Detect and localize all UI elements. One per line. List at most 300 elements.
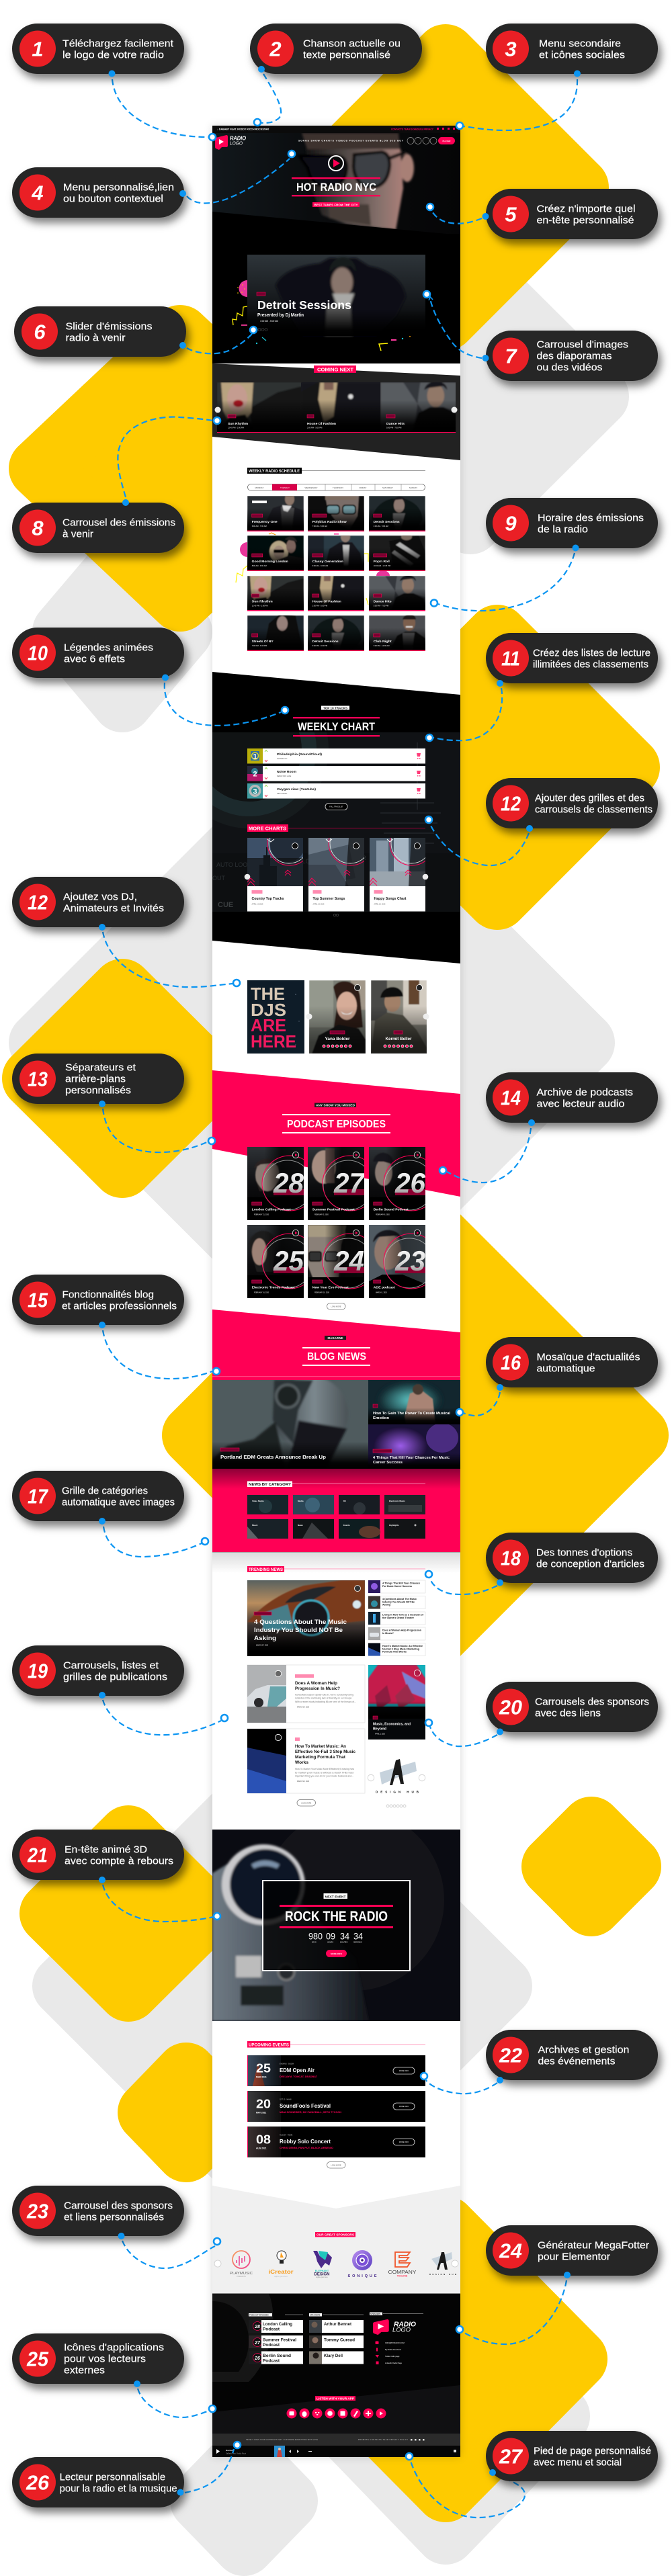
- arrow 3: [456, 79, 577, 130]
- heading: coming next: [314, 366, 356, 373]
- show: Detroit Sessions evening: Detroit Sessions: [312, 640, 339, 644]
- event row: SoundFools Festival: MORE INFO: [399, 2106, 409, 2108]
- mosaic: how to gain article: Emotion: [373, 1416, 389, 1420]
- mockup page base: [212, 126, 460, 2457]
- label: listen with your app: LISTEN WITH YOUR APP: [317, 2397, 354, 2400]
- show card: House Of Fashion: 2:00 PM - 5:00 PM: [307, 426, 323, 429]
- button: load more: [297, 1799, 316, 1806]
- callout 10: Légendes animées: [64, 642, 153, 653]
- mosaic: main article: Portland EDM Greats Announce Break Up: [220, 1454, 326, 1460]
- countdown: 34: [353, 1931, 363, 1942]
- show: Good Morning London: [247, 535, 304, 571]
- callout 6: [14, 306, 186, 357]
- show: Classy Generation: 9:00 AM - 10:00 AM: [312, 564, 329, 567]
- sponsor: elephant design: ELEPHANT: [315, 2270, 329, 2272]
- callout 12 left: [12, 877, 184, 927]
- footer podcast: Berlin Sound: [249, 2352, 303, 2364]
- show: Club Night: 9:30 PM - 12:00 AM: [374, 644, 390, 647]
- mosaic: 4 things article: [368, 1423, 460, 1469]
- callout 26: [12, 2457, 184, 2507]
- chart card: Top Summer Songs: APRIL 14, 2019: [313, 903, 325, 906]
- arrow 12 right: [425, 816, 529, 865]
- day tabs: WEDNESDAY: [304, 486, 318, 489]
- callout 26: Lecteur personnalisable: [60, 2471, 165, 2483]
- callout 1: 1: [32, 38, 44, 60]
- event row: EDM Open Air: [247, 2055, 425, 2086]
- chart card: Country Top Tracks: Country Top Tracks: [251, 897, 284, 901]
- category: music: Music: [252, 1524, 258, 1527]
- panel: DJ carousel: [247, 980, 429, 1054]
- category: highlights: [384, 1519, 425, 1539]
- arrow 23: [122, 2238, 220, 2268]
- podcast 27: FEBRUARY 5, 2020: [314, 1213, 329, 1216]
- callout 17: automatique avec images: [62, 1497, 175, 1508]
- schedule confetti: [236, 533, 390, 605]
- show: Polybius Radio Show: 7:00 AM - 8:00 AM: [312, 525, 328, 527]
- show: Sun Rhythm: Sun Rhythm: [252, 599, 273, 603]
- callout 16: Mosaïque d'actualités: [536, 1352, 640, 1363]
- card: Kermit Beller: [371, 980, 427, 1054]
- callout 24: Générateur MegaFotter: [538, 2240, 649, 2251]
- chart row 1: Philadelphia (SoundCloud): [277, 753, 322, 757]
- callout 20: avec des liens: [535, 1708, 601, 1719]
- button: load more: [327, 2162, 345, 2168]
- callout 12 right: carrousels de classements: [535, 804, 653, 816]
- column: speakers: SPEAKERS: [310, 2314, 321, 2317]
- sponsor: elephant design: tagline goes here: [316, 2276, 329, 2278]
- callout 21: [12, 1830, 184, 1880]
- podcast 23: ADE podcast: [374, 1286, 395, 1290]
- show card: Sun Rhythm: 12:45 PM - 2:00 PM: [228, 426, 245, 429]
- callout 3: Menu secondaire: [539, 38, 621, 50]
- label: any show you missed: [314, 1103, 356, 1107]
- chart row 2: SEBASTIAN LANE: [277, 775, 292, 777]
- podcast 25: [247, 1225, 317, 1298]
- day tabs: SUNDAY: [409, 486, 417, 489]
- callout 8: à venir: [62, 528, 93, 540]
- callout 12 right: Ajouter des grilles et des: [535, 793, 644, 804]
- show: Detroit Sessions: [369, 496, 425, 531]
- post card: music economics: Beyond: [373, 1727, 386, 1731]
- callout 8: 8: [32, 516, 44, 540]
- event row: Robby Solo Concert: MORE INFO: [399, 2141, 409, 2143]
- arrow 11: [426, 688, 502, 741]
- category grid: [247, 1495, 425, 1539]
- slide title: Detroit Sessions: [257, 298, 351, 312]
- post card: how to market music: [247, 1729, 365, 1793]
- heading: blog news: BLOG NEWS: [307, 1351, 366, 1363]
- footer logo: RADIO: [394, 2321, 416, 2329]
- callout 18: 18: [501, 1547, 521, 1570]
- card: the djs are here: THE: [251, 984, 285, 1004]
- label: any show you missed: ANY SHOW YOU MISSED: [316, 1103, 355, 1107]
- category: news: News: [298, 1524, 303, 1527]
- callout 27: 27: [499, 2444, 523, 2468]
- callout 1: le logo de votre radio: [62, 50, 164, 60]
- podcast 25: Electronic Trends Podcast: [252, 1286, 295, 1290]
- callout 27: [486, 2431, 658, 2481]
- sponsor: design hub: [429, 2252, 456, 2276]
- chart row 2: Noise Room: [277, 770, 296, 774]
- callout 14: 14: [501, 1086, 521, 1110]
- callout 22: 22: [499, 2044, 522, 2067]
- label: next event: NEXT EVENT: [325, 1895, 346, 1898]
- sidebar post list: [368, 1580, 425, 1656]
- callout 13: Séparateurs et: [65, 1062, 136, 1074]
- callout 3: [486, 24, 658, 74]
- show: Dance Hits: [369, 575, 425, 611]
- countdown labels: DAYS: [312, 1942, 317, 1943]
- arrow 25: [138, 2389, 216, 2417]
- chart card: Happy Songs Chart: APRIL 14, 2019: [374, 903, 386, 906]
- button: more info: [326, 1950, 347, 1957]
- callout 17: 17: [28, 1485, 49, 1508]
- event row: Robby Solo Concert: [247, 2127, 425, 2157]
- callout 19: [12, 1645, 184, 1696]
- schedule heading: [247, 468, 425, 474]
- show: Detroit Sessions: 4:00 AM - 5:00 AM: [374, 525, 389, 527]
- show: Good Morning London: 8:00 AM - 9:00 AM: [252, 564, 267, 567]
- turntable background photo: CUE: [218, 901, 233, 909]
- event row: EDM Open Air: DEEJAYM, TOMCAT, DEADBAT: [280, 2075, 317, 2078]
- label: top 10 tracks: TOP 10 TRACKS: [323, 707, 347, 710]
- speaker: Klary Dell: Klary Dell: [324, 2354, 343, 2358]
- turntable background photo: [170, 670, 460, 912]
- sidebar post 1: For Music Career Success: [382, 1585, 412, 1588]
- callout 9: Horaire des émissions: [538, 512, 644, 524]
- show: Detroit Sessions evening: [308, 615, 364, 651]
- event row: EDM Open Air: EVENING · SALEM: [280, 2063, 294, 2065]
- callout 20: [486, 1682, 658, 1732]
- featured post card: MARCH 27, 2020: [256, 1645, 269, 1646]
- turntable background photo: AUTO LOOP: [216, 861, 251, 868]
- countdown labels: [312, 1942, 362, 1943]
- callout 21: avec compte à rebours: [65, 1856, 173, 1866]
- callout 12 left: Ajoutez vos DJ,: [63, 891, 137, 903]
- category: media: Media: [298, 1500, 304, 1502]
- speaker: Tommy Curead: Tommy Curead: [324, 2338, 355, 2342]
- sidebar post 2: Asking: [382, 1604, 390, 1606]
- chart row 2: [247, 766, 425, 781]
- day tabs: TUESDAY: [280, 486, 290, 489]
- arrow 2: [254, 74, 281, 126]
- callout 4: [12, 167, 184, 218]
- carousel arrows: [215, 407, 457, 413]
- callout 13: [12, 1054, 184, 1104]
- sidebar post 3: [368, 1612, 425, 1625]
- chart row 2: 2: [253, 770, 257, 778]
- callout 7: ou des vidéos: [536, 361, 602, 374]
- callout 26: 26: [26, 2471, 50, 2494]
- chart card: Country Top Tracks: [247, 821, 312, 911]
- sidebar post 4: [368, 1627, 425, 1640]
- callout 20: 20: [499, 1696, 522, 1719]
- hero face photo: [299, 133, 414, 230]
- sponsor: icreator: [269, 2251, 294, 2278]
- chart row 1: [247, 748, 425, 763]
- chart row 3: Oxygen view (Youtube): [277, 787, 316, 791]
- callout 17: Grille de catégories: [62, 1485, 148, 1497]
- day tabs: MONDAY: [255, 486, 263, 489]
- callout 12 right: 12: [501, 791, 521, 816]
- time: 4:00 AM - 5:00 AM: [260, 320, 278, 323]
- day tabs: THURSDAY: [333, 486, 343, 489]
- card: Yana Bolder: [309, 980, 366, 1054]
- sidebar post 5: Formula That Works: [382, 1651, 407, 1654]
- label: magazine: [325, 1336, 346, 1340]
- mosaic: 4 things article: Career Success: [373, 1461, 403, 1465]
- post card: music economics: Music, Economics, and: [373, 1723, 411, 1727]
- sponsor: design hub: DESIGN HUB: [429, 2273, 456, 2276]
- callout 16: [486, 1337, 658, 1387]
- callout 7: Carrousel d'images: [536, 339, 628, 351]
- callout 13: personnalisés: [65, 1084, 131, 1097]
- callout 1: Téléchargez facilement: [62, 38, 174, 50]
- callout 14: [486, 1072, 658, 1123]
- sponsor logo: design hub: DESIGN HUB: [376, 1790, 419, 1794]
- button: load more: LOAD MORE: [331, 1306, 341, 1307]
- panel: footer: [212, 2293, 460, 2457]
- event row: SoundFools Festival: MAIA SCHNEIDER, MC PANICBALL, SETH TYCOON: [280, 2111, 342, 2114]
- callout 4: 4: [31, 181, 44, 204]
- callout 21: 21: [27, 1844, 48, 1866]
- callout 6: 6: [34, 320, 46, 344]
- show: Detroit Sessions: Detroit Sessions: [374, 520, 400, 524]
- callout 2: texte personnalisé: [303, 50, 390, 60]
- copyright bar: [212, 2434, 460, 2446]
- callout 2: Chanson actuelle ou: [303, 38, 401, 50]
- footer podcast: Summer Festival: Podcast: [263, 2344, 280, 2348]
- slider dots: [258, 328, 267, 331]
- heading: upcoming events: [247, 2041, 425, 2048]
- connector start dots above callouts: [99, 66, 581, 2495]
- category: music: [247, 1519, 288, 1539]
- post card: how to market music: Works: [295, 1760, 309, 1765]
- footer podcast: Summer Festival: 27: [254, 2341, 261, 2346]
- sponsor: sonique: [348, 2250, 377, 2278]
- app icons: [286, 2408, 386, 2419]
- category: electronic music: Electronic Music: [389, 1500, 405, 1502]
- connector arrows: [103, 74, 577, 2518]
- callout 15: 15: [28, 1289, 48, 1312]
- callout 25: 25: [26, 2348, 49, 2370]
- sidebar post 4: Does A Woman Help Progression: [382, 1629, 421, 1631]
- play icon: [329, 156, 343, 171]
- event row: EDM Open Air: EDM Open Air: [280, 2067, 314, 2073]
- chart row 1: 1: [253, 753, 257, 761]
- heading: coming next: COMING NEXT: [317, 367, 353, 372]
- chart row 3: 3: [253, 787, 257, 796]
- podcast 23: 23: [394, 1245, 425, 1277]
- show card: House Of Fashion: [301, 382, 381, 433]
- category: electronic music: [384, 1495, 425, 1514]
- arrow 24: [456, 2280, 566, 2344]
- post card: how to market music: important thing you can do for your music business and...: [295, 1775, 353, 1778]
- footer podcast: Berlin Sound: Berlin Sound: [263, 2354, 291, 2358]
- show: Frequency One: 6:00 AM - 7:00 AM: [252, 525, 267, 527]
- callout 16: automatique: [536, 1363, 595, 1375]
- button: more info: MORE INFO: [331, 1952, 343, 1955]
- callout 24: pour Elementor: [538, 2251, 610, 2263]
- turntable background photo: SAMPLER: [337, 855, 367, 861]
- panel: blog news: [212, 1310, 460, 1553]
- event row: EDM Open Air: MAR 2021: [256, 2076, 267, 2079]
- post card: does a woman help: [247, 1665, 365, 1723]
- heading: more charts: MORE CHARTS: [249, 825, 286, 832]
- live badge: [257, 292, 265, 296]
- show card: Dance Hits: 5:00 PM - 7:00 PM: [386, 426, 402, 429]
- callout 18: de conception d'articles: [536, 1559, 644, 1570]
- event row: SoundFools Festival: 20: [256, 2098, 271, 2111]
- event row: SoundFools Festival: OCT 15 · MIAMI: [280, 2099, 292, 2100]
- countdown: 09: [326, 1931, 335, 1942]
- column: footer contacts: [370, 2313, 423, 2364]
- callout 7: des diaporamas: [536, 351, 612, 361]
- footer podcast: Summer Festival: [249, 2335, 303, 2348]
- post card: how to market music: How To Market Music: An: [295, 1744, 346, 1749]
- show: House Of Fashion: [308, 576, 364, 611]
- copyright bar: PROMOTE CONTACTS TEAM PRIVACY POLICY: [358, 2439, 408, 2441]
- callout 15: et articles professionnels: [62, 1301, 177, 1312]
- category: video: Video Media: [252, 1500, 264, 1502]
- callout 12 left: 12: [28, 891, 48, 914]
- footer podcast: London Calling: Podcast: [263, 2327, 280, 2331]
- podcast 23: MARCH 1, 2020: [376, 1291, 387, 1294]
- sidebar post 2: 4 Questions About The Music: [382, 1598, 417, 1600]
- heading: trending news: [247, 1566, 425, 1572]
- callout 11: Créez des listes de lecture: [533, 648, 650, 658]
- show: Classy Generation: [308, 531, 364, 571]
- callout 11: illimitées des classements: [533, 658, 648, 671]
- day tabs: [247, 484, 425, 490]
- show: Polybius Radio Show: Polybius Radio Show: [312, 520, 347, 524]
- panel: upcoming events: [247, 2041, 425, 2168]
- chart card: Happy Songs Chart: Happy Songs Chart: [374, 897, 407, 901]
- chart card: Top Summer Songs: [308, 821, 373, 911]
- sponsor: sonique: SONIQUE: [348, 2274, 377, 2278]
- callout 14: Archive de podcasts: [536, 1087, 633, 1098]
- post card: how to market music: Effective No-Fail 3 Step Music: [295, 1750, 355, 1754]
- label: magazine: MAGAZINE: [328, 1336, 343, 1340]
- event box: [263, 1881, 410, 1971]
- carousel arrows: [306, 1013, 429, 1020]
- panel: hero header: [212, 126, 460, 363]
- round icon buttons: [407, 137, 437, 144]
- show: Pop'n Roll: Pop'n Roll: [374, 560, 390, 564]
- arrow 27: [406, 2453, 525, 2518]
- callout 25: Icônes d'applications: [64, 2342, 164, 2353]
- label: our great sponsors: [315, 2232, 355, 2237]
- callout 22: des événements: [538, 2056, 616, 2067]
- countdown: 980: [308, 1931, 323, 1942]
- callout 25: pour vos lecteurs: [64, 2353, 146, 2365]
- mosaic: 4 things article: 4 Things That Kill Your Chances For Music: [373, 1456, 450, 1460]
- post card: music economics: [368, 1665, 425, 1740]
- callout 23: Carrousel des sponsors: [64, 2200, 173, 2212]
- callout 18: Des tonnes d'options: [536, 1547, 632, 1559]
- hero title: HOT RADIO NYC: [296, 181, 376, 194]
- callout 12 right: [486, 778, 658, 828]
- footer podcast: Berlin Sound: Podcast: [263, 2360, 280, 2364]
- button: load more: LOAD MORE: [331, 2165, 341, 2166]
- show: House Of Fashion: House Of Fashion: [312, 599, 341, 603]
- arrow 18: [425, 1571, 497, 1594]
- event row: SoundFools Festival: [247, 2091, 425, 2122]
- post card: does a woman help: reminded of the continuing lack of diversity on our lineups.: [295, 1697, 352, 1700]
- sidebar post 3: the Opera's Grand Theatre: [382, 1617, 414, 1619]
- heading: more charts: [247, 824, 425, 832]
- show card: House Of Fashion: House Of Fashion: [307, 422, 336, 426]
- podcast 23: [369, 1225, 439, 1298]
- button: load more: [327, 1303, 345, 1310]
- show: Club Night: [369, 614, 425, 651]
- card: the djs are here: DJS: [251, 1000, 286, 1020]
- event row: Robby Solo Concert: CHRIS DENNI, PAN PUT, BLACK ARSENIO: [280, 2147, 334, 2149]
- show: Good Morning London: Good Morning London: [252, 560, 288, 564]
- card: the djs are here: [247, 980, 304, 1054]
- podcast 24: 24: [333, 1245, 364, 1277]
- card: the djs are here: ARE: [251, 1015, 286, 1035]
- show card: Dance Hits: [380, 382, 460, 433]
- footer podcast: Berlin Sound: 26: [254, 2356, 260, 2361]
- carousel arrows: [214, 2260, 458, 2267]
- arrow 17: [103, 1527, 208, 1557]
- carousel dots: [386, 1805, 406, 1807]
- footer podcast: London Calling: [249, 2320, 303, 2333]
- event row: Robby Solo Concert: AUG 2021: [256, 2147, 267, 2150]
- callout 22: [486, 2030, 658, 2080]
- chart row 1: LESTER FOY: [277, 758, 288, 760]
- callout 11: [486, 633, 658, 683]
- event row: SoundFools Festival: SoundFools Festival: [280, 2103, 331, 2109]
- callout 25: externes: [64, 2365, 105, 2376]
- panel: 3D countdown hero: [212, 1809, 460, 2021]
- callout 25: [12, 2333, 184, 2384]
- carousel dots: [333, 914, 339, 916]
- countdown labels: MINUTES: [340, 1942, 348, 1943]
- callout 9: de la radio: [538, 524, 588, 535]
- callout 13: 13: [28, 1067, 48, 1091]
- category: dj: [339, 1495, 380, 1514]
- event row: EDM Open Air: 25: [256, 2061, 271, 2075]
- category: events: [339, 1519, 380, 1539]
- sponsor: company: COMPANY: [388, 2270, 417, 2275]
- callout 19: 19: [28, 1660, 48, 1682]
- audio player bar: DaBaby Feat. Roddy Ricch: [226, 2452, 247, 2455]
- callout 7: 7: [505, 344, 517, 368]
- callout 3: 3: [505, 38, 517, 60]
- podcast 26: FEBRUARY 8, 2020: [376, 1213, 390, 1216]
- callout 5: [486, 189, 658, 239]
- countdown labels: SECONDS: [353, 1942, 362, 1943]
- heading: rock the radio: ROCK THE RADIO: [285, 1909, 388, 1924]
- contact lines: My Radio Facebook: [385, 2348, 402, 2351]
- sponsor logo: design hub: [368, 1759, 425, 1794]
- arrow 26: [185, 2442, 241, 2493]
- callout 22: Archives et gestion: [538, 2044, 629, 2056]
- podcast 26: 26: [394, 1167, 426, 1199]
- heading: rock the radio: [280, 1905, 393, 1928]
- callout 27: avec menu et social: [534, 2456, 622, 2468]
- show: Dance Hits: Dance Hits: [374, 599, 392, 603]
- callout 10: avec 6 effets: [64, 653, 125, 665]
- featured post card: 4 Questions About The Music: [254, 1619, 347, 1625]
- sidebar post 5: How To Market Music: An Effective: [382, 1645, 423, 1647]
- arrow 20: [425, 1719, 497, 1746]
- contact lines: INFO@MYRADIO.COM: [385, 2342, 405, 2344]
- callout 1: [12, 24, 184, 74]
- website mockup column: [170, 126, 460, 2457]
